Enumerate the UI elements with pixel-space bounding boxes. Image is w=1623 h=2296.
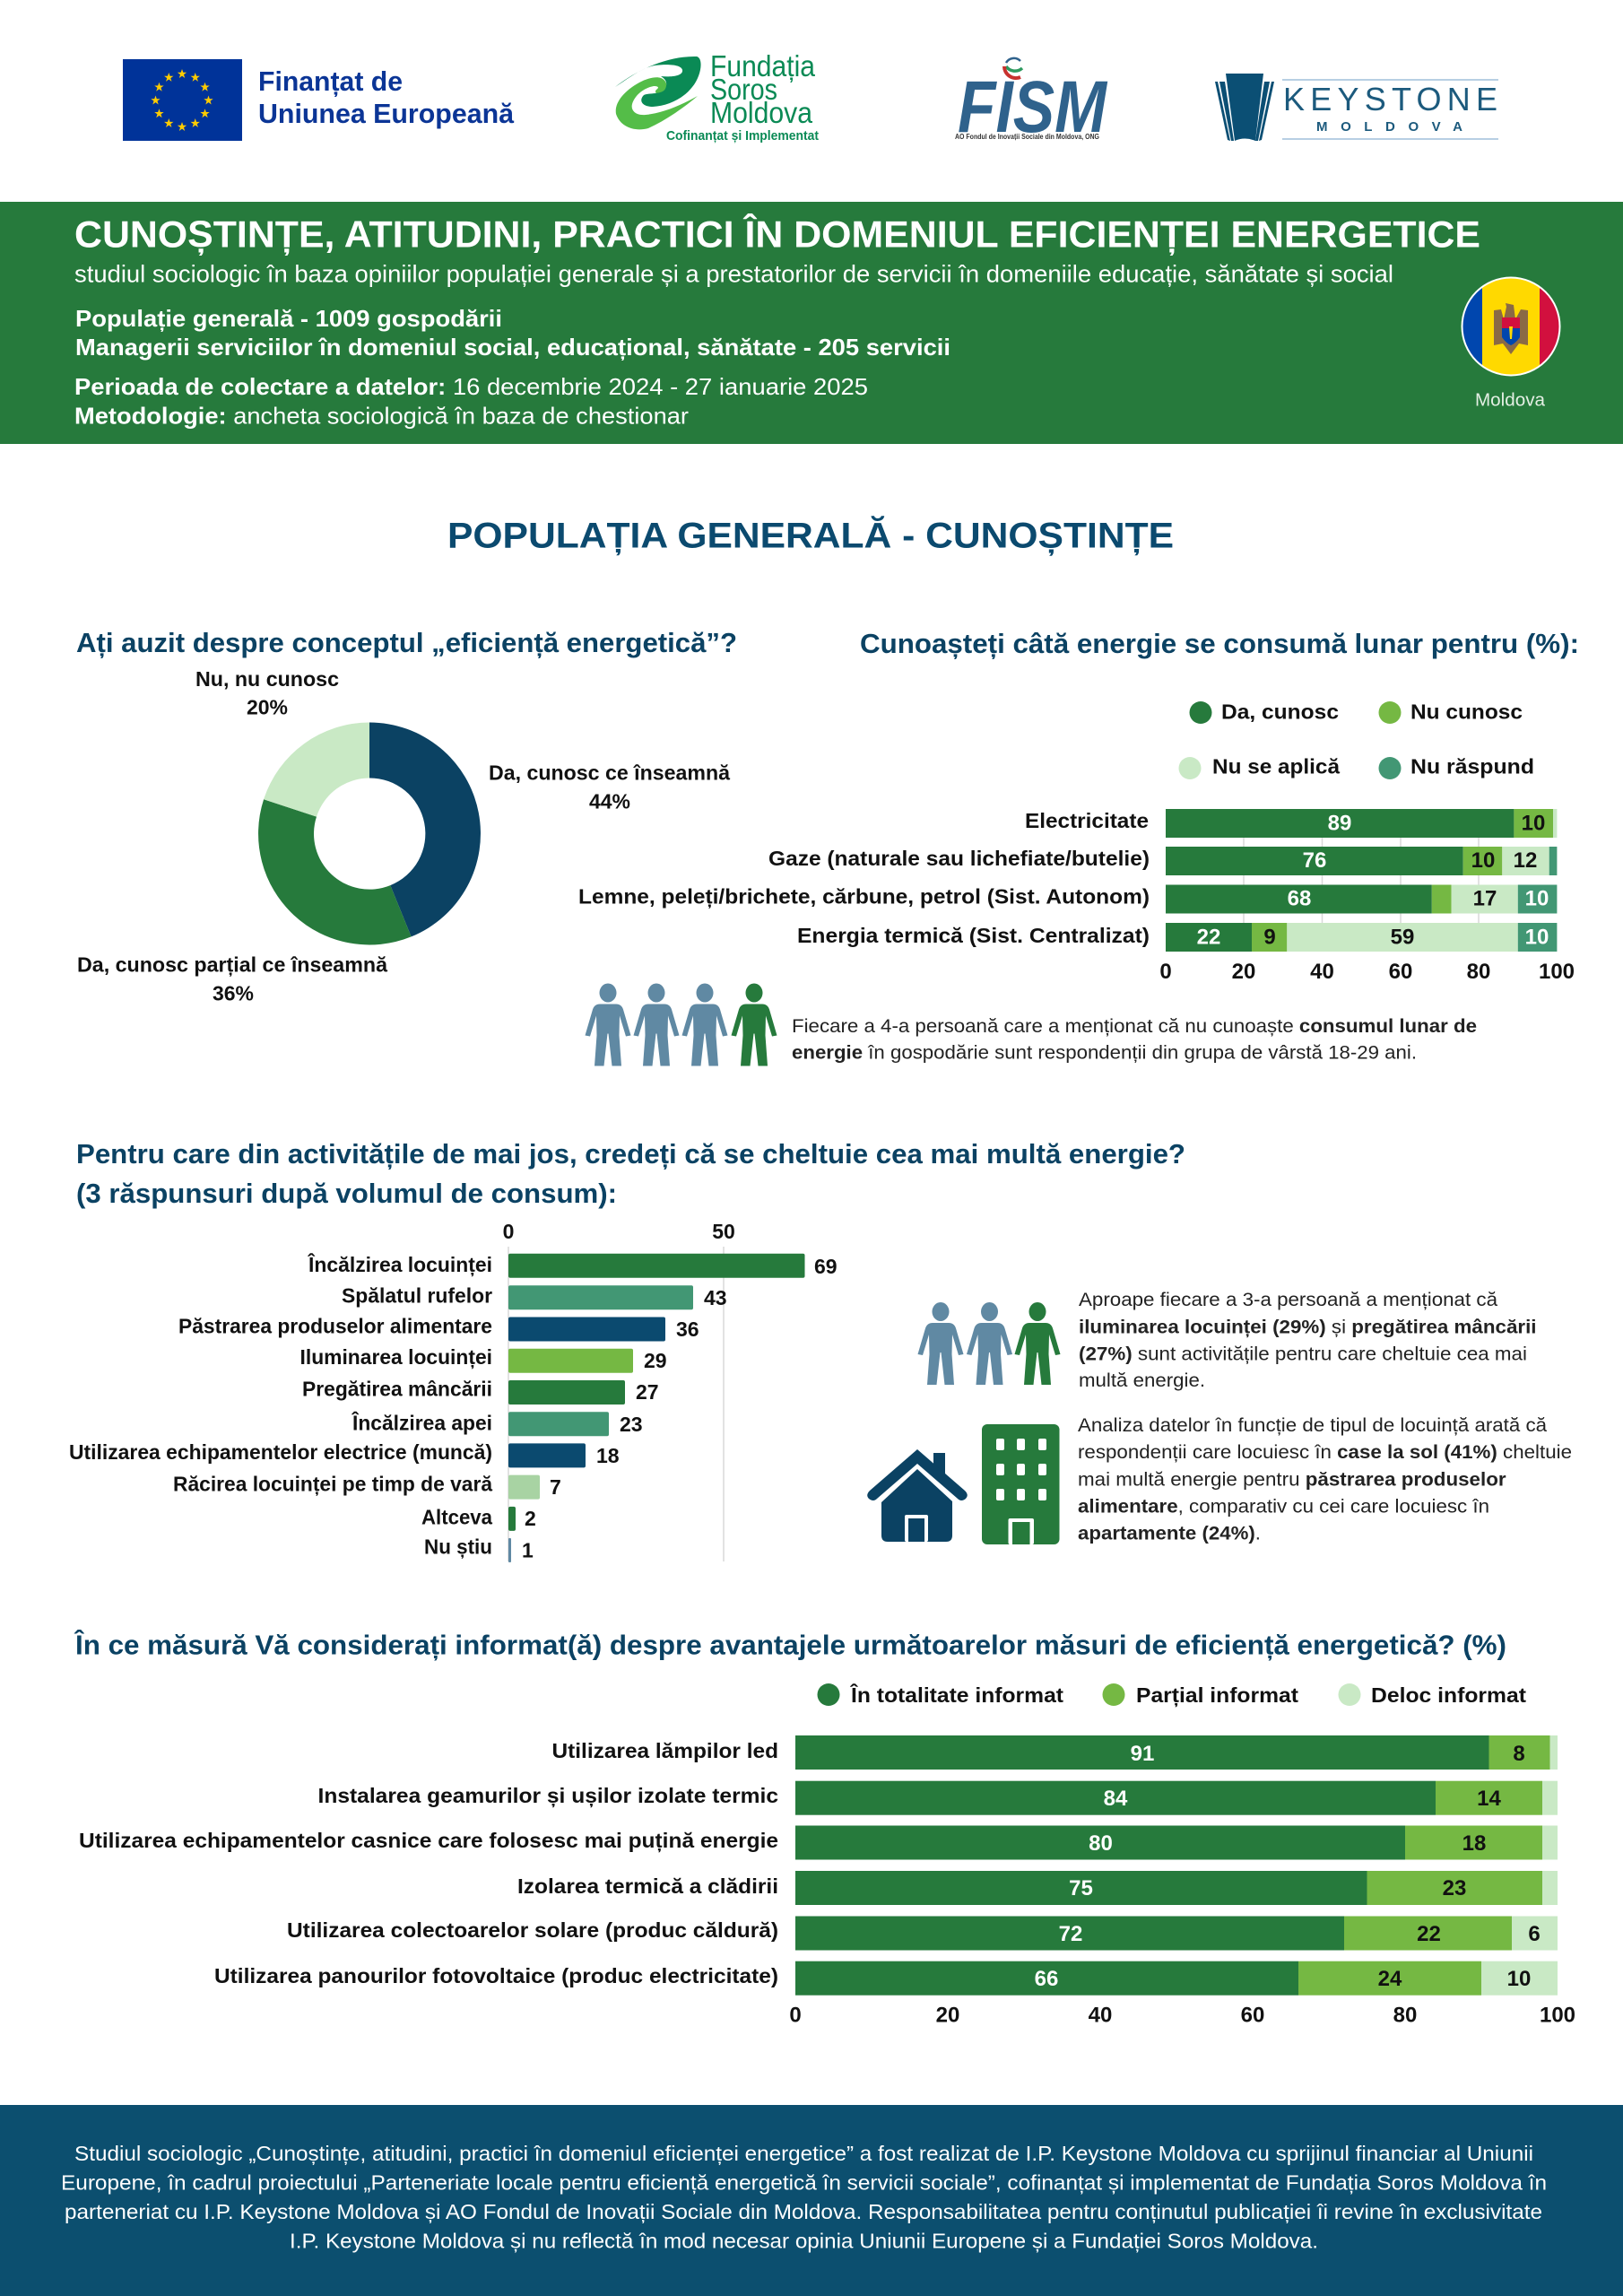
flag caption: Moldova (1475, 391, 1546, 411)
logo: FISM: FISM (958, 66, 1107, 148)
heading: informed: În ce măsură Vă considerați informat(ă) despre avantajele următoarelor măsuri de eficiență energetică? (%) (74, 1629, 1506, 1661)
row: gas: Gaze (naturale sau lichefiate/butelie) (768, 847, 1150, 870)
callout: lighting and cooking (1079, 1290, 1537, 1391)
icon: four people (585, 983, 777, 1065)
logo: Funded by the European Union (123, 59, 515, 141)
legend: Parțial informat (1136, 1683, 1298, 1708)
bar: 18: 18 (596, 1444, 620, 1467)
axis labels (1159, 960, 1575, 984)
callout: lighting and cooking: iluminarea locuinței (29%) și pregătirea mâncării (1079, 1318, 1537, 1338)
row: wood and other fuels: Lemne, peleți/brichete, cărbune, petrol (Sist. Autonom) (578, 884, 1150, 909)
heading: activities (76, 1138, 1185, 1209)
row: LED: Utilizarea lămpilor led (552, 1739, 778, 1762)
sample description: Managerii serviciilor în domeniul social, educațional, sănătate - 205 servicii (75, 334, 950, 361)
row: LED: 8 (1513, 1742, 1525, 1766)
footer text: parteneriat cu I.P. Keystone Moldova și AO Fondul de Inovații Sociale din Moldova. Responsabilitatea pentru conținutul publicației îi revine în exclusivitate (65, 2200, 1542, 2223)
axis labels: 80 (1467, 960, 1490, 984)
bar: 29: 29 (644, 1349, 667, 1372)
bar: 43: Spălatul rufelor (342, 1284, 492, 1308)
row: solar collectors (287, 1916, 1558, 1950)
row: photovoltaic panels: 10 (1507, 1967, 1531, 1991)
heading: activities: Pentru care din activitățile de mai jos, credeți că se cheltuie cea mai multă energie? (76, 1138, 1185, 1170)
bar: 18: Utilizarea echipamentelor electrice (muncă) (69, 1440, 492, 1464)
axis labels: 40 (1310, 960, 1334, 984)
callout: housing type: respondenții care locuiesc în case la sol (41%) cheltuie (1078, 1442, 1572, 1463)
donut chart (258, 723, 481, 944)
sample description: Populație generală - 1009 gospodării (75, 305, 502, 332)
footer text: Europene, în cadrul proiectului „Parteneriate locale pentru eficiență energetică în servicii sociale”, cofinanțat și implementat de Fundația Soros Moldova în (61, 2170, 1547, 2194)
callout: age group: Fiecare a 4-a persoană care a menționat că nu cunoaște consumul lunar de (792, 1016, 1477, 1037)
axis labels: 0 (1159, 960, 1172, 984)
panel: monthly consumption knowledge (578, 628, 1579, 1065)
logo: FISM: AO Fondul de Inovații Sociale din Moldova, ONG (955, 133, 1099, 141)
bar: 43 (342, 1284, 727, 1309)
callout: housing type: apartamente (24%) . (1078, 1524, 1261, 1544)
axis labels (789, 2004, 1575, 2027)
logo: Fundația Soros Moldova: Fundația (710, 49, 816, 83)
panel: title banner (0, 202, 1623, 444)
bar: 2: Altceva (421, 1505, 492, 1528)
callout: lighting and cooking: Aproape fiecare a 3-a persoană a menționat că (1079, 1290, 1497, 1310)
axis labels: 100 (1540, 2004, 1575, 2027)
row: insulation: 23 (1443, 1876, 1466, 1900)
bar: 27: 27 (636, 1380, 659, 1404)
label: yes (489, 761, 730, 813)
row: gas (768, 847, 1557, 875)
footer text: I.P. Keystone Moldova și nu reflectă în mod necesar opinia Uniunii Europene și a Fundației Soros Moldova. (290, 2230, 1318, 2253)
logo: Fundația Soros Moldova: Soros (710, 73, 777, 106)
row: insulation (517, 1871, 1558, 1905)
horizontal bar chart (69, 1220, 838, 1562)
bar: 36: Păstrarea produselor alimentare (178, 1315, 492, 1338)
row: thermal energy: 9 (1263, 926, 1276, 949)
bar: 23: Încălzirea apei (352, 1410, 492, 1435)
row: solar collectors: 6 (1528, 1922, 1541, 1946)
row: wood and other fuels: 10 (1525, 886, 1549, 911)
legend (818, 1683, 1526, 1708)
bar: 2 (421, 1505, 536, 1531)
label: partly (77, 952, 387, 1004)
legend: În totalitate informat (850, 1683, 1063, 1707)
stacked bar chart (578, 809, 1575, 984)
label: no: Nu, nu cunosc (195, 667, 339, 691)
heading: activities: (3 răspunsuri după volumul de consum): (76, 1178, 617, 1209)
logo: Fundația Soros Moldova: Cofinanțat și Implementat (666, 128, 819, 144)
row: thermal energy (797, 923, 1557, 952)
icon: Moldova flag (1462, 276, 1561, 377)
label: partly: Da, cunosc parțial ce înseamnă (77, 952, 387, 978)
row: wood and other fuels: 68 (1288, 886, 1311, 911)
axis labels: 0 (789, 2004, 802, 2027)
bar: 29: Iluminarea locuinței (299, 1345, 492, 1370)
axis labels: 60 (1389, 960, 1412, 984)
legend: Deloc informat (1371, 1683, 1526, 1707)
heading: monthly consumption: Cunoașteți câtă energie se consumă lunar pentru (%): (860, 628, 1579, 659)
callout: age group (792, 1016, 1477, 1064)
row: electricity: 89 (1328, 811, 1351, 836)
row: thermal energy: 10 (1525, 926, 1549, 949)
bar: 43: 43 (704, 1286, 727, 1309)
axis labels: 20 (936, 2004, 959, 2027)
period and methodology (74, 373, 868, 429)
sample description (75, 305, 950, 361)
subtitle: studiul sociologic în baza opiniilor populației generale și a prestatorilor de servicii în domeniile educație, sănătate și social (74, 260, 1393, 287)
row: gas: 10 (1471, 848, 1495, 873)
legend: Nu cunosc (1410, 700, 1523, 723)
row: solar collectors: 22 (1417, 1922, 1441, 1946)
row: windows (317, 1781, 1558, 1815)
bar: 1: Nu știu (424, 1535, 492, 1559)
label: yes: 44% (589, 789, 630, 813)
icon: apartment building (982, 1424, 1060, 1544)
row: electricity: 10 (1522, 811, 1545, 836)
period and methodology: Perioada de colectare a datelor: 16 decembrie 2024 - 27 ianuarie 2025 (74, 373, 868, 400)
axis labels: 80 (1393, 2004, 1417, 2027)
logo: Funded by the European Union: Uniunea Europeană (258, 98, 515, 129)
icon: house (867, 1449, 968, 1542)
logo: Funded by the European Union: Finanțat de (258, 65, 403, 97)
logo: Fundația Soros Moldova: Moldova (710, 96, 813, 129)
row: LED: 91 (1131, 1742, 1154, 1766)
axis labels: 20 (1232, 960, 1255, 984)
logo: Keystone Moldova (1215, 74, 1498, 141)
logo: Keystone Moldova: MOLDOVA (1316, 119, 1462, 135)
callout: lighting and cooking: (27%) sunt activitățile pentru care cheltuie cea mai (1079, 1344, 1527, 1365)
axis labels: 40 (1089, 2004, 1112, 2027)
bar: 69: 69 (814, 1255, 838, 1278)
section heading: POPULAȚIA GENERALĂ - CUNOȘTINȚE (447, 515, 1174, 556)
heading: awareness question: Ați auzit despre conceptul „eficiență energetică”? (76, 627, 737, 658)
row: photovoltaic panels: 24 (1378, 1967, 1402, 1991)
bar: 27: Pregătirea mâncării (302, 1378, 492, 1401)
icon: three people (918, 1302, 1060, 1385)
row: thermal energy: Energia termică (Sist. Centralizat) (797, 924, 1150, 947)
callout: housing type: Analiza datelor în funcție de tipul de locuință arată că (1078, 1415, 1547, 1436)
panel: informed about measures (74, 1629, 1575, 2027)
panel: energy consuming activities (69, 1138, 1572, 1562)
row: appliances: 18 (1462, 1831, 1486, 1856)
bar: 69: Încălzirea locuinței (308, 1252, 492, 1277)
horizontal bar chart: 50 (712, 1220, 735, 1243)
row: solar collectors: Utilizarea colectoarelor solare (produc căldură) (287, 1918, 778, 1942)
legend: Nu se aplică (1212, 755, 1340, 778)
axis labels: 100 (1539, 960, 1575, 984)
bar: 29 (299, 1345, 667, 1373)
row: photovoltaic panels: Utilizarea panourilor fotovoltaice (produc electricitate) (214, 1964, 778, 1987)
bar: 7: Răcirea locuinței pe timp de vară (173, 1473, 492, 1496)
row: thermal energy: 22 (1197, 926, 1220, 949)
label: no: 20% (247, 696, 288, 719)
callout: housing type (1078, 1415, 1572, 1544)
bar: 69 (308, 1252, 838, 1278)
label: yes: Da, cunosc ce înseamnă (489, 761, 730, 784)
row: solar collectors: 72 (1059, 1922, 1082, 1946)
bar: 27 (302, 1378, 659, 1405)
row: appliances: 80 (1089, 1831, 1113, 1856)
row: windows: 14 (1477, 1787, 1501, 1811)
row: insulation: 75 (1069, 1876, 1093, 1900)
period and methodology: Metodologie: ancheta sociologică în baza de chestionar (74, 402, 689, 429)
legend: Da, cunosc (1221, 700, 1339, 723)
row: electricity: Electricitate (1025, 809, 1149, 832)
bar: 23 (352, 1410, 643, 1436)
row: appliances: Utilizarea echipamentelor casnice care folosesc mai puțină energie (79, 1829, 778, 1853)
axis labels: 60 (1241, 2004, 1264, 2027)
row: photovoltaic panels (214, 1961, 1558, 1996)
stacked bar chart (79, 1735, 1575, 2027)
panel: footer (0, 2105, 1623, 2296)
row: appliances (79, 1826, 1558, 1860)
logo: Keystone Moldova: KEYSTONE (1283, 81, 1497, 117)
bar: 1: 1 (522, 1539, 534, 1562)
callout: housing type: alimentare , comparativ cu cei care locuiesc în (1078, 1497, 1489, 1518)
row: insulation: Izolarea termică a clădirii (517, 1874, 778, 1898)
bar: 1 (424, 1535, 534, 1562)
bar: 23: 23 (620, 1413, 643, 1436)
footer text: Studiul sociologic „Cunoștințe, atitudini, practici în domeniul eficienței energetice” a fost realizat de I.P. Keystone Moldova cu sprijinul financiar al Uniunii (74, 2142, 1533, 2165)
row: gas: 76 (1303, 848, 1326, 873)
bar: 36: 36 (676, 1318, 699, 1341)
row: electricity (1025, 809, 1557, 838)
label: no (195, 667, 339, 719)
row: gas: 12 (1514, 848, 1537, 873)
bar: 18 (69, 1440, 620, 1467)
panel: awareness donut (76, 627, 737, 1004)
label: partly: 36% (213, 981, 254, 1004)
logo: Fundația Soros Moldova (615, 49, 819, 144)
bar: 36 (178, 1315, 699, 1342)
bar: 7: 7 (550, 1475, 561, 1499)
row: wood and other fuels (578, 884, 1557, 913)
legend (1178, 700, 1534, 779)
main title: CUNOȘTINȚE, ATITUDINI, PRACTICI ÎN DOMENIUL EFICIENȚEI ENERGETICE (74, 212, 1480, 257)
callout: lighting and cooking: multă energie. (1079, 1370, 1205, 1391)
callout: housing type: mai multă energie pentru păstrarea produselor (1078, 1470, 1506, 1491)
row: windows: Instalarea geamurilor și ușilor izolate termic (317, 1784, 778, 1808)
row: LED (552, 1735, 1558, 1770)
horizontal bar chart: 0 (503, 1220, 514, 1243)
footer text (61, 2142, 1547, 2253)
callout: age group: energie în gospodărie sunt respondenții din grupa de vârstă 18-29 ani. (792, 1042, 1417, 1064)
bar: 2: 2 (525, 1507, 536, 1530)
row: thermal energy: 59 (1391, 926, 1414, 949)
row: wood and other fuels: 17 (1473, 886, 1497, 911)
row: photovoltaic panels: 66 (1035, 1967, 1058, 1991)
row: windows: 84 (1104, 1787, 1128, 1811)
legend: Nu răspund (1410, 755, 1534, 778)
